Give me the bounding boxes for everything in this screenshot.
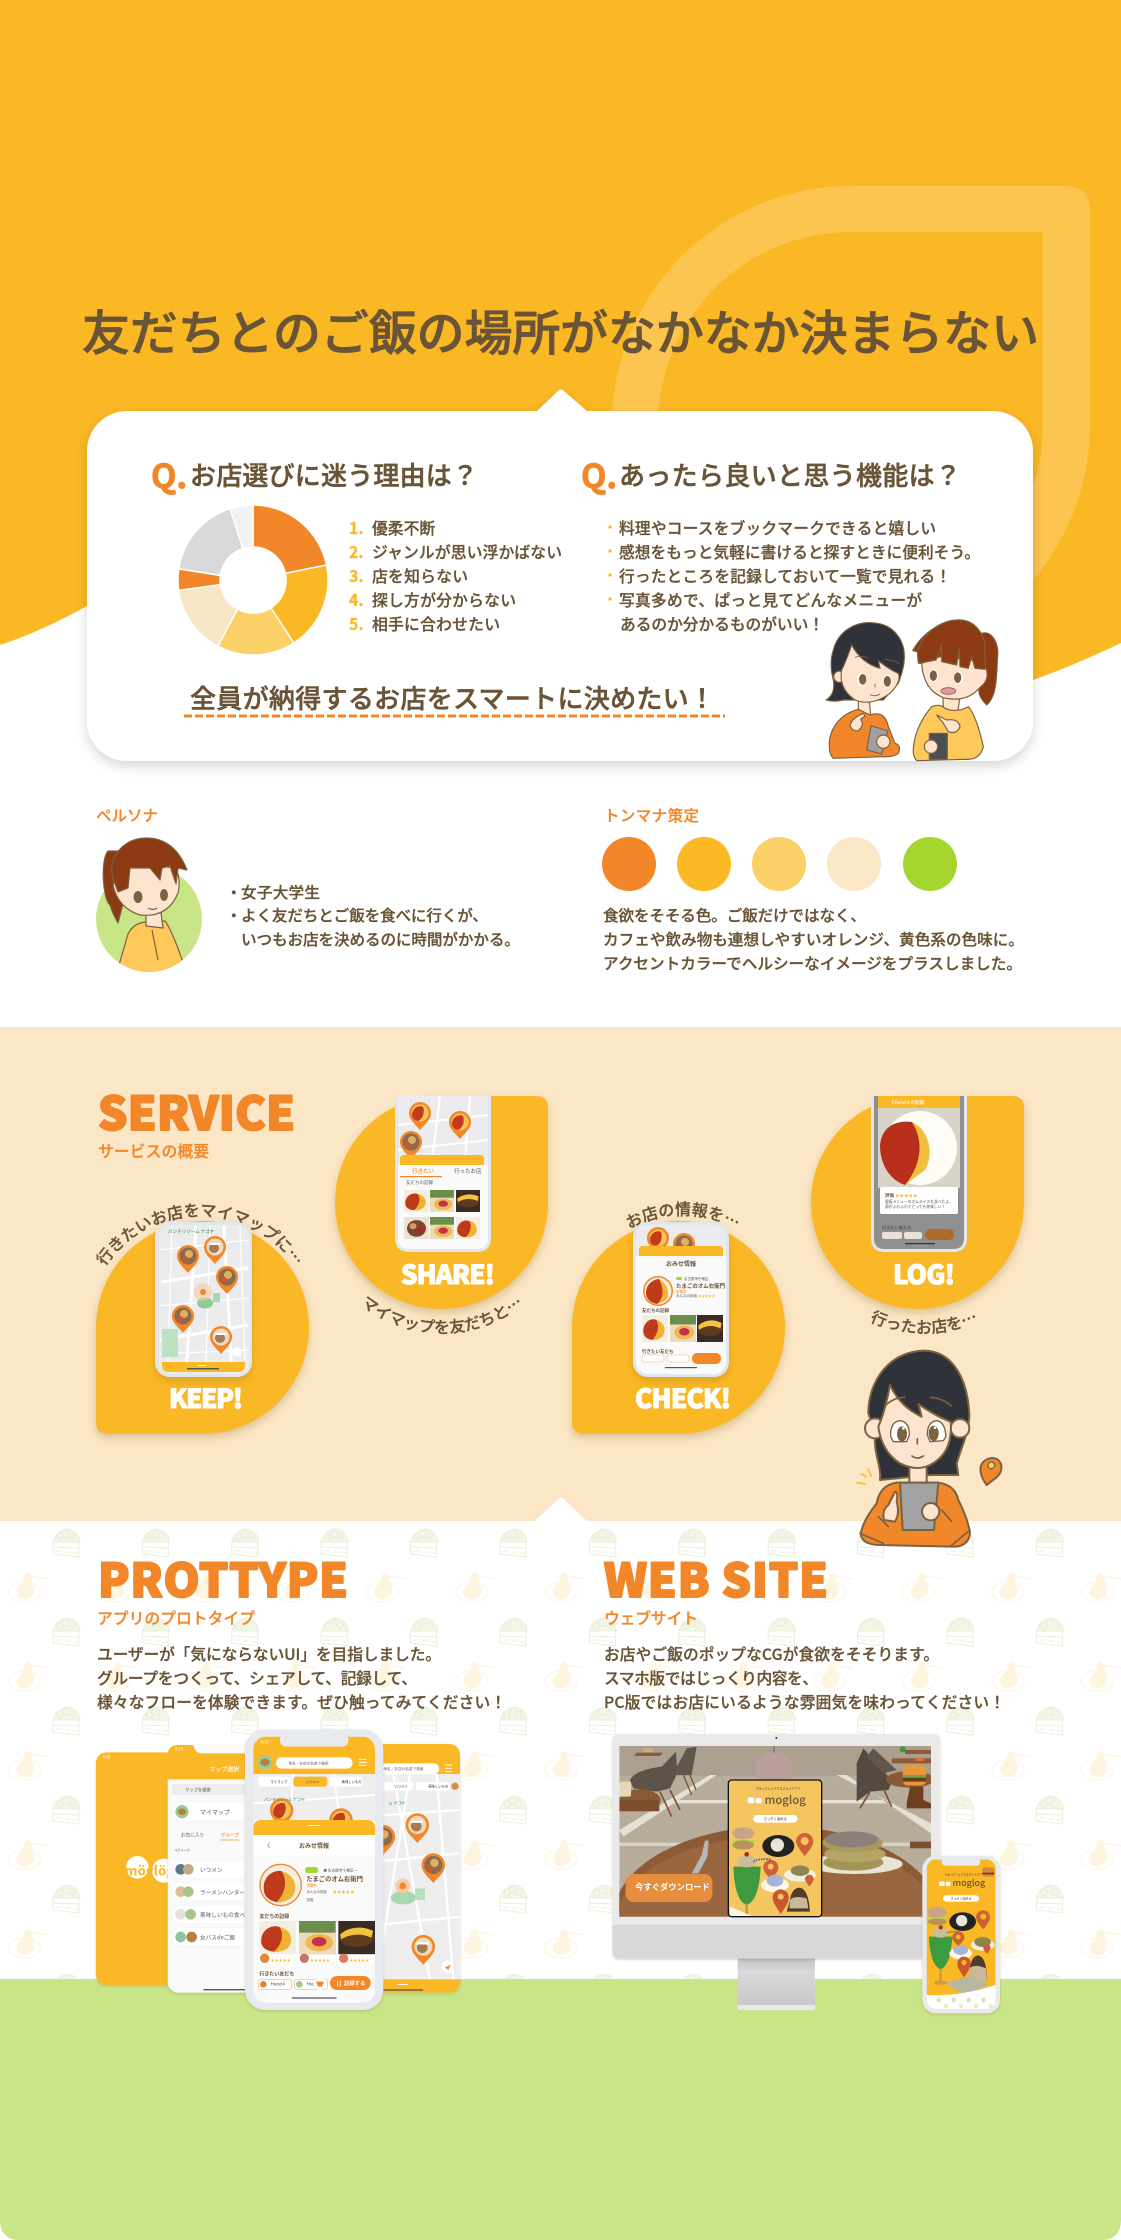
- feature wish list: [608, 516, 980, 635]
- phone check: 名古屋市千種区: [684, 1276, 709, 1282]
- teardrop share: [335, 1096, 548, 1309]
- web site description: スマホ版ではじっくり内容を、: [604, 1666, 818, 1689]
- main shop info phone: ● 名古屋市千種区一: [323, 1868, 357, 1874]
- phone keep: パンチリゾーム ナゴヤ: [168, 1228, 215, 1235]
- feature wish list: あるのか分かるものがいい！: [620, 612, 824, 635]
- map list phone: いつメン: [200, 1865, 223, 1874]
- log label: LOG!: [893, 1255, 955, 1292]
- keep label: KEEP!: [169, 1379, 243, 1416]
- conclusion statement: 全員が納得するお店をスマートに決めたい！: [190, 679, 715, 716]
- heading: web site: WEB SITE: [604, 1545, 828, 1611]
- curved caption share: マイマップを友だちと…: [366, 1296, 520, 1334]
- pattern background: [0, 1521, 1121, 1979]
- tone and manner label: トンマナ策定: [604, 804, 699, 826]
- phone share: [395, 1096, 491, 1252]
- map phone: ム ナゴヤ: [388, 1799, 405, 1806]
- phone log: [871, 1096, 967, 1252]
- map phone: 美味しいもの: [428, 1784, 449, 1789]
- main shop info phone: 行きたい友だち: [259, 1970, 294, 1977]
- main shop info phone: 地名・お店の名前で検索: [288, 1760, 329, 1766]
- teardrop check: [572, 1221, 785, 1434]
- main shop info phone: 詳細: [307, 1897, 314, 1902]
- tone and manner description: [603, 904, 1024, 974]
- map list phone: 5:10: [175, 1747, 184, 1753]
- heading: prototype: アプリのプロトタイプ: [97, 1606, 255, 1629]
- map list phone: マップを検索: [185, 1786, 212, 1793]
- website hero screen: [619, 1746, 931, 1917]
- persona description: よく友だちとご飯を食べに行くが、: [241, 904, 488, 926]
- main shop info phone: Friend: [307, 1982, 318, 1988]
- web site description: [604, 1642, 1005, 1713]
- main shop info phone: 〈: [264, 1841, 270, 1850]
- map list phone: マップ選択: [209, 1765, 239, 1774]
- phone share: 行ったお店: [454, 1167, 482, 1175]
- reasons ranking list: 4.: [349, 588, 363, 611]
- heading: service: サービスの概要: [98, 1139, 209, 1162]
- icon: persona avatar: [96, 838, 202, 980]
- reasons ranking list: ジャンルが思い浮かばない: [372, 540, 562, 563]
- reasons ranking list: 5.: [349, 612, 363, 635]
- phone keep: [155, 1222, 252, 1377]
- persona label: ペルソナ: [96, 804, 158, 826]
- phone share: 友だちの記録: [406, 1179, 433, 1186]
- heading: reasons question: Q.: [151, 450, 187, 498]
- persona description: いつもお店を決めるのに時間がかかる。: [241, 928, 520, 950]
- icon: location pin: [981, 1458, 1002, 1485]
- splash screen phone: möglög: [125, 1860, 174, 1879]
- map list phone: お気に入り: [181, 1832, 204, 1839]
- desktop and mobile web mockups: [613, 1734, 1000, 2017]
- main shop info phone: 営業中: [307, 1883, 317, 1888]
- splash screen phone: 5:10: [103, 1755, 110, 1760]
- heading: reasons question: [151, 450, 478, 498]
- heading: prototype: PROTTYPE: [98, 1545, 348, 1611]
- main shop info phone: 5:10: [261, 1739, 269, 1745]
- teardrop keep: [96, 1221, 309, 1434]
- heading: web site: ウェブサイト: [604, 1606, 698, 1629]
- heading: feature question: Q.: [581, 450, 617, 498]
- map list phone: グループ: [221, 1832, 239, 1839]
- card background with notch: [87, 390, 1033, 761]
- panel: log: [808, 1096, 1028, 1334]
- phone check: みんなの評価 ★★★★★: [676, 1293, 716, 1299]
- notch between sections: [534, 1498, 588, 1522]
- map list phone: マイマップ: [200, 1808, 230, 1817]
- feature wish list: 料理やコースをブックマークできると嬉しい: [619, 516, 936, 539]
- green footer band: [0, 1979, 1121, 2240]
- donut chart: [178, 505, 328, 655]
- map list phone: 4グループ: [175, 1848, 191, 1853]
- reasons ranking list: 店を知らない: [372, 564, 468, 587]
- colour swatches: [602, 837, 957, 891]
- main shop info phone: ★★★★★: [271, 1958, 291, 1964]
- prototype description: グループをつくって、シェアして、記録して、: [97, 1666, 417, 1689]
- persona description: ・: [226, 881, 242, 903]
- monitor: [613, 1734, 940, 2017]
- main shop info phone: ★★★★★: [349, 1958, 369, 1964]
- main shop info phone: Friend A: [271, 1982, 286, 1988]
- phone check: 行きたい友だち: [642, 1348, 674, 1355]
- main shop info phone: ★★★★★: [310, 1958, 330, 1964]
- tone and manner description: カフェや飲み物も連想しやすいオレンジ、黄色系の色味に。: [603, 928, 1024, 950]
- panel: share: [332, 1096, 552, 1334]
- main shop info phone: ★★★★★: [333, 1890, 355, 1896]
- feature wish list: 行ったところを記録しておいて一覧で見れる！: [619, 564, 951, 587]
- panel: service section background: [0, 1027, 1121, 1521]
- tablet layout preview: moglog: [765, 1792, 806, 1808]
- phone check: 営業中: [676, 1289, 687, 1295]
- panel: survey card: [87, 390, 1033, 761]
- web site description: PC版ではお店にいるような雰囲気を味わってください！: [604, 1690, 1005, 1713]
- prototype description: [97, 1642, 506, 1713]
- persona description: [226, 881, 520, 950]
- web site description: お店やご飯のポップなCGが食欲をそそります。: [604, 1642, 939, 1665]
- map list phone: ラーメンハンター: [200, 1887, 245, 1896]
- mobile website phone: ぎゅってシェアするグルメアプリ: [945, 1872, 985, 1876]
- heading: feature question: [581, 450, 961, 498]
- phone log: Friend A の記録: [892, 1099, 925, 1106]
- map list phone: 美味しいもの食べ: [200, 1910, 246, 1919]
- phone check: おみせ情報: [666, 1259, 696, 1268]
- reasons ranking list: 2.: [349, 540, 363, 563]
- curved caption check: お店の情報を…: [626, 1201, 738, 1228]
- phone log: 評価 ★★★★★: [885, 1192, 918, 1199]
- check label: CHECK!: [635, 1379, 731, 1416]
- map phone: [382, 1744, 462, 1995]
- main shop info phone: 友だちの記録: [259, 1913, 289, 1920]
- decorative leaf outline: [612, 186, 1090, 664]
- panel: keep: [92, 1204, 312, 1442]
- mobile website phone: moglog: [953, 1876, 986, 1889]
- illustration: two friends: [826, 620, 998, 761]
- phone log: 行きたい友だち: [882, 1224, 911, 1231]
- reasons ranking list: 3.: [349, 564, 363, 587]
- prototype description: 様々なフローを体験できます。ぜひ触ってみてください！: [97, 1690, 506, 1713]
- feature wish list: 写真多めで、ぱっと見てどんなメニューが: [619, 588, 922, 611]
- main shop info phone: [245, 1729, 383, 2010]
- mobile website phone: さっそく始める: [951, 1896, 971, 1901]
- phone check: たまごのオム右衛門: [676, 1282, 726, 1290]
- main shop info phone: おみせ情報: [299, 1841, 329, 1850]
- main shop info phone: みんなの評価: [307, 1889, 327, 1894]
- panel: check: [568, 1201, 788, 1442]
- tablet layout preview: ぎゅってシェアするグルメアプリ: [756, 1785, 801, 1790]
- hero yellow background: [0, 0, 1121, 680]
- map list phone: 女バスdeご飯: [200, 1933, 235, 1942]
- main shop info phone: 美味しいもの: [342, 1779, 362, 1784]
- download button: [626, 1874, 712, 1902]
- phone log: 看板メニューのオムライスを食べたよ。: [885, 1199, 953, 1205]
- download button: 今すぐダウンロード: [635, 1881, 710, 1893]
- main shop info phone: たまごのオム右衛門: [306, 1874, 363, 1883]
- map list phone: [168, 1745, 258, 1993]
- phone log: 卵がふわふわでとっても美味しい！: [885, 1204, 945, 1210]
- reasons ranking list: 探し方が分からない: [372, 588, 516, 611]
- curved caption keep: 行きたいお店をマイマップに…: [96, 1204, 300, 1266]
- phone check: 友だちの記録: [642, 1307, 669, 1314]
- heading: reasons question: お店選びに迷う理由は？: [190, 456, 478, 493]
- curved caption log: 行ったお店を…: [872, 1310, 976, 1334]
- heading: feature question: あったら良いと思う機能は？: [619, 456, 961, 493]
- persona description: ・: [226, 904, 242, 926]
- mobile website phone: [922, 1856, 1000, 2013]
- feature wish list: 感想をもっと気軽に書けると探すときに便利そう。: [619, 540, 980, 563]
- tablet layout preview: [728, 1780, 822, 1917]
- reasons ranking list: 1.: [349, 516, 363, 539]
- tablet layout preview: さっそく始める: [764, 1816, 787, 1821]
- phone check: [633, 1222, 729, 1377]
- main shop info phone: パンチリゾーム ナゴヤ: [264, 1796, 305, 1803]
- tone and manner description: 食欲をそそる色。ご飯だけではなく、: [603, 904, 866, 926]
- phone share: 行きたい: [412, 1167, 435, 1175]
- reasons ranking list: 優柔不断: [372, 516, 435, 539]
- heading: service: SERVICE: [98, 1078, 295, 1144]
- share label: SHARE!: [401, 1255, 495, 1292]
- main shop info phone: マイマップ: [271, 1779, 288, 1784]
- main shop info phone: 記録する: [344, 1979, 365, 1987]
- reasons ranking list: [349, 516, 562, 635]
- reasons ranking list: 相手に合わせたい: [372, 612, 500, 635]
- teardrop log: [811, 1096, 1024, 1309]
- map phone: いつメン: [394, 1784, 408, 1789]
- illustration: girl with tablet: [857, 1351, 1002, 1547]
- prototype description: ユーザーが「気にならないUI」を目指しました。: [97, 1642, 441, 1665]
- splash screen phone: [96, 1752, 176, 1985]
- title: 友だちとのご飯の場所がなかなか決まらない: [82, 294, 1039, 364]
- prototype phones: [96, 1729, 460, 2010]
- persona description: 女子大学生: [241, 881, 320, 903]
- map phone: 地名・お店の名前で検索: [383, 1766, 424, 1772]
- main shop info phone: いつメン: [306, 1779, 320, 1784]
- tone and manner description: アクセントカラーでヘルシーなイメージをプラスしました。: [603, 952, 1022, 974]
